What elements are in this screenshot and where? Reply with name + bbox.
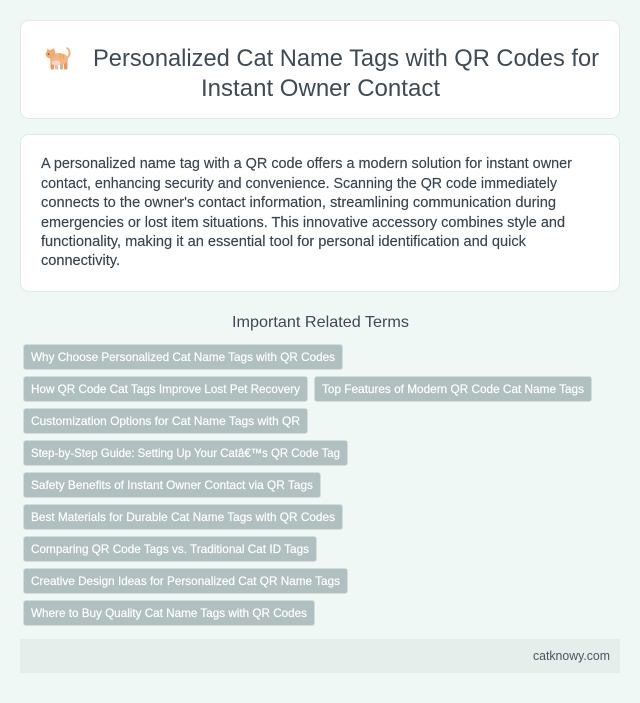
- tag 8: [24, 536, 316, 562]
- related terms tags: [24, 344, 592, 626]
- tag 4: [24, 408, 308, 434]
- tag 5: [24, 440, 348, 466]
- description text: contact, enhancing security and convenience. Scanning the QR code immediately: [41, 176, 558, 192]
- tag 2: How QR Code Cat Tags Improve Lost Pet Recovery: [31, 382, 300, 396]
- tag 10: [24, 600, 314, 626]
- description text: connects to the owner's contact information, streamlining communication during: [41, 195, 556, 211]
- tag 9: [24, 568, 348, 594]
- footer: [20, 639, 620, 673]
- tag 6: [24, 472, 320, 498]
- tag 3: [314, 376, 592, 402]
- heading: related terms: Important Related Terms: [232, 314, 409, 331]
- panel: title header: [20, 20, 620, 118]
- tag 2: [24, 376, 308, 402]
- description text: connectivity.: [41, 253, 120, 269]
- tag 9: Creative Design Ideas for Personalized Cat QR Name Tags: [31, 574, 340, 588]
- tag 1: [24, 344, 342, 370]
- tag 4: Customization Options for Cat Name Tags with QR: [31, 414, 300, 428]
- tag 6: Safety Benefits of Instant Owner Contact via QR Tags: [31, 478, 313, 492]
- tag 3: Top Features of Modern QR Code Cat Name Tags: [322, 382, 584, 396]
- description text: emergencies or lost item situations. This innovative accessory combines style and: [41, 215, 565, 231]
- tag 1: Why Choose Personalized Cat Name Tags with QR Codes: [31, 350, 335, 364]
- title: Instant Owner Contact: [201, 75, 440, 102]
- description text: A personalized name tag with a QR code offers a modern solution for instant owner: [41, 156, 572, 172]
- description text: functionality, making it an essential tool for personal identification and quick: [41, 234, 527, 250]
- tag 5: Step-by-Step Guide: Setting Up Your Catâ€™s QR Code Tag: [31, 446, 340, 460]
- tag 7: Best Materials for Durable Cat Name Tags with QR Codes: [31, 510, 335, 524]
- icon: cat: [46, 47, 70, 70]
- tag 7: [24, 504, 342, 530]
- footer source: catknowy.com: [533, 648, 610, 663]
- title: Personalized Cat Name Tags with QR Codes for: [93, 45, 599, 72]
- description text: [41, 156, 572, 269]
- title: [93, 45, 599, 102]
- tag 8: Comparing QR Code Tags vs. Traditional Cat ID Tags: [31, 542, 309, 556]
- panel: description: [20, 134, 620, 292]
- tag 10: Where to Buy Quality Cat Name Tags with QR Codes: [31, 606, 307, 620]
